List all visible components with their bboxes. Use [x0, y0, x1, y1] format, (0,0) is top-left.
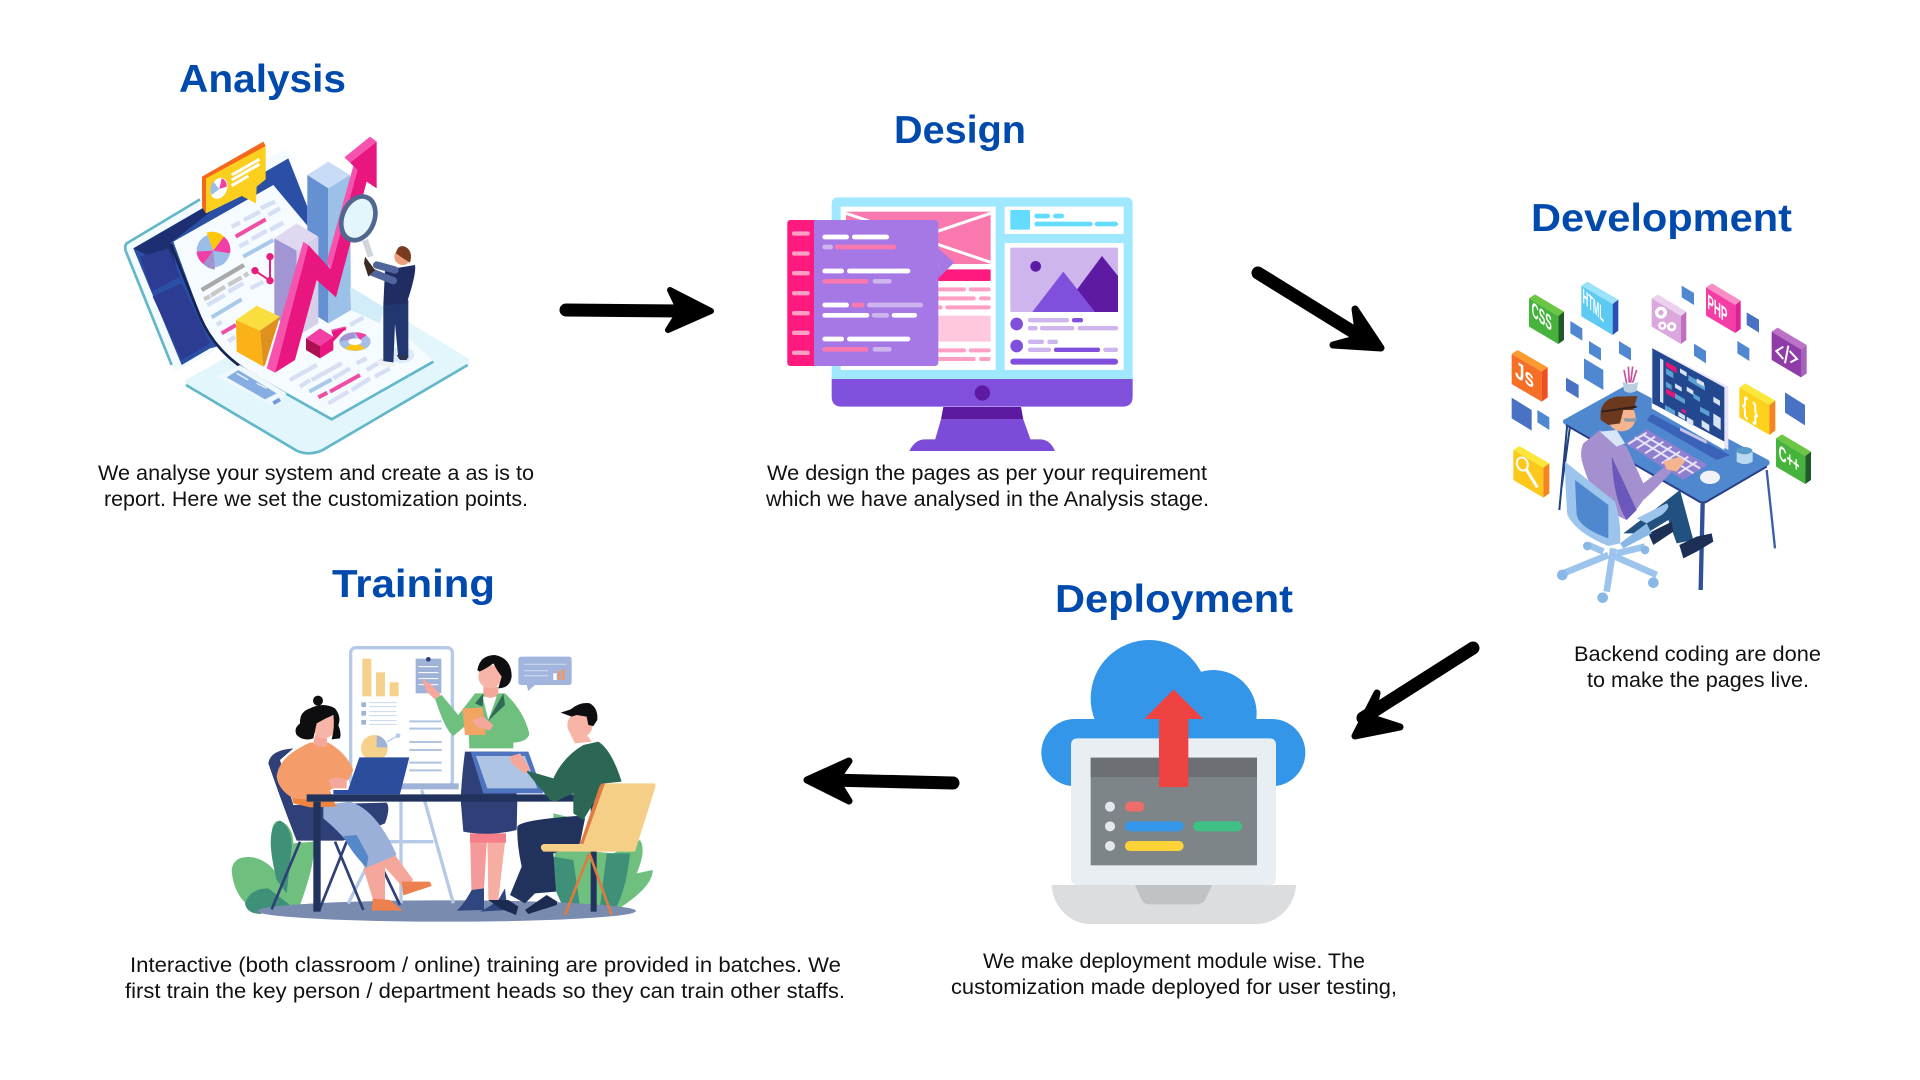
description: development [1574, 642, 1821, 692]
illustration: analyst with charts on laptop [125, 137, 469, 453]
illustration: desktop monitor with page layouts [787, 197, 1133, 451]
tile: braces [1739, 383, 1775, 435]
description: development: Backend coding are done [1574, 642, 1821, 666]
small floating blue squares [1512, 286, 1805, 431]
tile: C++: C++ [1779, 439, 1799, 478]
heading: design: Design [894, 109, 1026, 152]
tile: JS: Js [1515, 355, 1534, 394]
description: design: which we have analysed in the Analysis stage. [765, 487, 1209, 511]
panel: deployment [951, 578, 1397, 999]
panel: design [765, 109, 1209, 511]
description: analysis [98, 461, 534, 511]
description: analysis: report. Here we set the customization points. [104, 487, 528, 511]
illustration: laptop uploading to cloud [1041, 640, 1305, 924]
heading: training: Training [332, 563, 495, 606]
tile: search [1513, 446, 1549, 498]
heading: analysis: Analysis [179, 58, 346, 101]
arrow: deployment to training [807, 761, 953, 801]
illustration: team meeting with presenter [232, 648, 656, 922]
tile: CSS: CSS [1532, 296, 1552, 336]
tile: braces: { } [1742, 389, 1759, 428]
tile: PHP [1706, 283, 1741, 333]
description: design [765, 461, 1209, 511]
tile: HTML [1581, 282, 1618, 335]
tile: code tag [1772, 328, 1807, 377]
tile: PHP: PHP [1707, 289, 1727, 329]
description: training [125, 953, 845, 1003]
heading: development: Development [1531, 197, 1792, 240]
arrow: development to deployment [1355, 648, 1473, 736]
tile: JS [1512, 350, 1548, 402]
arrow: analysis to design [566, 290, 711, 330]
description: analysis: We analyse your system and create a as is to [98, 461, 534, 485]
description: training: Interactive (both classroom / online) training are provided in batches. We [130, 953, 841, 977]
description: design: We design the pages as per your requirement [767, 461, 1207, 485]
tile: HTML: HTML [1583, 283, 1604, 328]
description: development: to make the pages live. [1587, 668, 1809, 692]
description: training: first train the key person / department heads so they can train other staffs. [125, 979, 845, 1003]
heading: deployment: Deployment [1055, 578, 1293, 621]
tile: CSS [1529, 294, 1564, 344]
description: deployment: customization made deployed for user testing, [951, 975, 1397, 999]
illustration: developer at desk with language tiles [1512, 282, 1811, 603]
panel: training [125, 563, 845, 1003]
tile: C++ [1776, 434, 1811, 484]
panel: development [1512, 197, 1821, 692]
panel: analysis [98, 58, 534, 511]
description: deployment [951, 949, 1397, 999]
description: deployment: We make deployment module wise. The [983, 949, 1365, 973]
tile: gears [1652, 294, 1686, 344]
arrow: design to development [1258, 273, 1381, 348]
